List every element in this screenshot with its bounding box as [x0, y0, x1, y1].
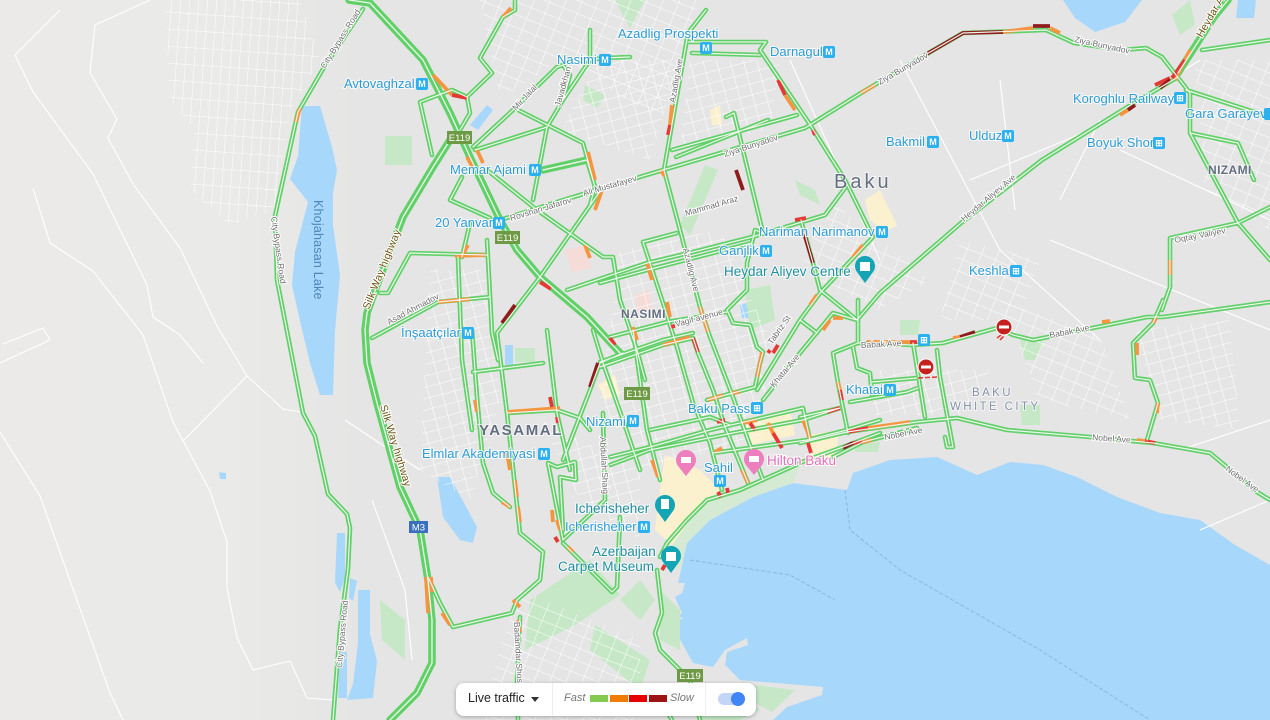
- district: Baku: Baku: [834, 171, 892, 193]
- road centre lines: [275, 0, 1270, 720]
- road label: Azadlig Ave north: Azadlig Ave: [667, 58, 685, 103]
- divider: [705, 683, 706, 716]
- road label: Vagif avenue: Vagif avenue: [674, 307, 724, 329]
- hospital tint: [565, 245, 652, 312]
- road label: Azadlig Ave south: Azadlig Ave: [681, 247, 702, 293]
- pond: northeast: [1236, 0, 1256, 18]
- road label: Mir Jalal: Mir Jalal: [510, 82, 539, 112]
- traffic: slow red segments: [452, 60, 1185, 570]
- station: rail stop on Babak Ave: ⊞: [920, 335, 928, 345]
- shield: E119 north: E119: [449, 133, 470, 144]
- district: Baku White City: WHITE CITY: [950, 401, 1040, 413]
- station: Nariman Narimanov: Nariman Narimanov: [759, 224, 875, 239]
- road label: Javadkhan: Javadkhan: [552, 65, 573, 108]
- toggle knob: [731, 692, 745, 706]
- highway label: Silk Way north: Silk Way highway: [361, 227, 404, 311]
- district names: [311, 163, 1252, 439]
- shield: M3: [409, 521, 428, 534]
- hotel: Hilton Baku: [744, 449, 836, 475]
- station: Avtovaghzal: M: [418, 79, 426, 89]
- station: Icherisheher: M: [640, 522, 648, 532]
- swatch: orange: [610, 695, 628, 702]
- station: Ganjlik: M: [762, 246, 770, 256]
- lighter western terrain: [0, 0, 360, 720]
- shield: E119 centre: E119: [626, 389, 648, 400]
- station: Baku Pass: Baku Pass: [688, 401, 751, 416]
- shield: E119 south: [677, 669, 703, 682]
- attractions and hotels: [558, 256, 875, 574]
- station: Sahil: [704, 460, 733, 487]
- station: Memar Ajami: M: [531, 165, 539, 175]
- road closure icons: [918, 319, 1012, 375]
- shield: M3: M3: [412, 522, 425, 534]
- station: Memar Ajami: Memar Ajami: [450, 162, 526, 177]
- station: Azadlig Prospekti: M: [702, 43, 710, 53]
- road label: Babak Ave west: Babak Ave: [861, 338, 902, 350]
- district: Yasamal: YASAMAL: [479, 422, 563, 439]
- closure: Babak Ave: [996, 319, 1012, 335]
- lake: Yasamal: [437, 477, 477, 543]
- lakes: southwest chain: [219, 472, 377, 700]
- sea: [673, 457, 1270, 720]
- shield: E119 centre west: E119: [497, 233, 518, 244]
- station: Sahil: Sahil: [704, 460, 733, 475]
- parks: [380, 0, 1195, 720]
- station: Koroghlu Railway: ⊞: [1176, 93, 1184, 103]
- station: Nizami: Nizami: [586, 414, 626, 429]
- closure: Khatai: [918, 359, 934, 375]
- station: rail stop on Babak Ave: [918, 334, 930, 346]
- station: Azadlig Prospekti: [618, 26, 719, 54]
- station: Insaatcilar: İnşaatçılar: [401, 325, 462, 340]
- lake name: Khojahasan Lake: [311, 200, 325, 300]
- road label: Nobel Ave east: Nobel Ave: [1224, 464, 1261, 494]
- station: 20 Yanvar: 20 Yanvar: [435, 215, 494, 230]
- place: Azerbaijan Carpet Museum: Azerbaijan: [592, 544, 656, 559]
- traffic: moderate orange segments: [296, 8, 1190, 632]
- road label: City Bypass Road south: City Bypass Road: [334, 600, 350, 668]
- road label: Babak Ave east: Babak Ave: [1048, 322, 1090, 340]
- station: Koroghlu Railway: Koroghlu Railway: [1073, 91, 1175, 106]
- district: Baku White City: BAKU: [972, 387, 1013, 399]
- road label: Khatai Ave: Khatai Ave: [768, 352, 802, 389]
- thick orange on highway: [426, 577, 432, 613]
- road label: Nobel Ave middle: Nobel Ave: [1092, 432, 1131, 445]
- road label: Tabriz St: Tabriz St: [765, 313, 793, 346]
- legend: slow: Slow: [670, 692, 694, 704]
- divider: [552, 683, 553, 716]
- station: Khatai: Khatai: [846, 382, 883, 397]
- station: Keshla: Keshla: [969, 263, 1010, 278]
- station: Nizami: M: [629, 416, 637, 426]
- toggle track: [718, 693, 744, 705]
- station: Khatai: M: [886, 385, 894, 395]
- road label: Abdullah Shaig: Abdullah Shaig: [598, 437, 611, 494]
- station: Ganjlik: Ganjlik: [719, 243, 759, 258]
- station: Azadlig Prospekti: Azadlig Prospekti: [618, 26, 719, 41]
- old town and beige areas: [598, 105, 897, 545]
- lake: Khojahasan: [290, 106, 340, 395]
- place: Azerbaijan Carpet Museum: Carpet Museum: [558, 559, 654, 574]
- road label: Ziya Bunyadov 1: Ziya Bunyadov: [723, 132, 780, 159]
- station: Elmlar Akademiyasi: M: [540, 449, 548, 459]
- highway shields: [409, 131, 703, 682]
- station: Boyuk Shor: ⊞: [1155, 138, 1163, 148]
- station: Sahil: M: [716, 476, 724, 486]
- place: Heydar Aliyev Centre: Heydar Aliyev Centre: [724, 264, 851, 279]
- road label: Ziya Bunyadov 2: Ziya Bunyadov: [876, 50, 930, 87]
- shield: E119 centre: [624, 387, 650, 400]
- coastal green strip: [665, 465, 800, 570]
- live traffic legend panel: [456, 683, 756, 716]
- road label: Nobel Ave west: Nobel Ave: [883, 425, 924, 442]
- district: Nizami: NIZAMI: [1208, 163, 1252, 177]
- road closures red dashes: [918, 335, 1004, 378]
- road label: Ziya Bunyadov 3: Ziya Bunyadov: [1074, 34, 1131, 56]
- pond: Yasamal north: [505, 345, 513, 365]
- district: Baku White City: [950, 387, 1040, 413]
- station: Nariman Narimanov: M: [878, 227, 886, 237]
- road label: Ali Mustafayev: Ali Mustafayev: [582, 173, 638, 198]
- layer selector: Live traffic: [468, 691, 525, 705]
- station: Ulduz: M: [1004, 131, 1012, 141]
- station: Darnagul: M: [825, 47, 833, 57]
- swatch: red: [629, 695, 647, 702]
- place: Icherisheher: Icherisheher: [575, 501, 650, 516]
- station: Nasimi: Nasimi: [557, 52, 597, 67]
- place: Heydar Aliyev Centre: [724, 256, 875, 283]
- place: Icherisheher: [575, 495, 675, 522]
- station: 20 Yanvar: M: [495, 218, 503, 228]
- highway label: Silk Way south: Silk Way highway: [377, 403, 414, 489]
- road label: Oqtay Valiyev: Oqtay Valiyev: [1173, 225, 1227, 245]
- shield: E119 south: E119: [679, 671, 701, 682]
- station: Darnagul: Darnagul: [770, 44, 823, 59]
- station: Bakmil: M: [929, 137, 937, 147]
- traffic: very slow dark red segments: [502, 26, 1170, 448]
- swatch: dark red: [649, 695, 667, 702]
- station: Baku Pass: ⊞: [753, 403, 761, 413]
- road names: [269, 0, 1261, 692]
- road label: City Bypass Road west: City Bypass Road: [269, 216, 288, 284]
- road label: Mammad Araz: Mammad Araz: [684, 193, 739, 218]
- road label: Heydar Aliyev Ave upper: Heydar Aliyev Ave: [959, 172, 1018, 224]
- traffic roads: green flowing network: [275, 0, 1270, 720]
- station: Gara Garayev: Gara Garayev: [1185, 106, 1267, 121]
- hotel: Hilton Baku: Hilton Baku: [767, 453, 836, 468]
- road label: City Bypass Road north: City Bypass Road: [318, 7, 363, 70]
- pond: Ganjilik park: [740, 303, 750, 318]
- ferry route lines: [690, 490, 1150, 720]
- hotel: pin west of Sahil: [676, 450, 696, 476]
- metro stations: [344, 26, 1270, 534]
- station: Insaatcilar: M: [464, 328, 472, 338]
- station: Bakmil: Bakmil: [886, 134, 925, 149]
- station: Elmlar Akademiyasi: Elmlar Akademiyasi: [422, 446, 536, 461]
- lake: northern Boyukshor: [1063, 0, 1142, 32]
- dropdown caret: [531, 697, 539, 702]
- station: Icherisheher: Icherisheher: [565, 519, 637, 534]
- place: Azerbaijan Carpet Museum: [558, 544, 681, 574]
- station: Ulduz: Ulduz: [969, 128, 1002, 143]
- station: Boyuk Shor: Boyuk Shor: [1087, 135, 1155, 150]
- road label: Asad Ahmadov: Asad Ahmadov: [385, 291, 441, 327]
- swatch: fast green: [590, 695, 608, 702]
- station: Avtovaghzal: Avtovaghzal: [344, 76, 415, 91]
- road label: Badamdar Shosse: Badamdar Shosse: [512, 622, 526, 692]
- district: Nasimi: NASIMI: [621, 307, 666, 321]
- road label: Rovshan Jafarov: Rovshan Jafarov: [509, 194, 573, 223]
- pond: Avtovaghzal: [470, 105, 493, 130]
- station: Keshla: ⊞: [1012, 266, 1020, 276]
- station: Nasimi: M: [601, 55, 609, 65]
- legend: fast: Fast: [564, 692, 585, 704]
